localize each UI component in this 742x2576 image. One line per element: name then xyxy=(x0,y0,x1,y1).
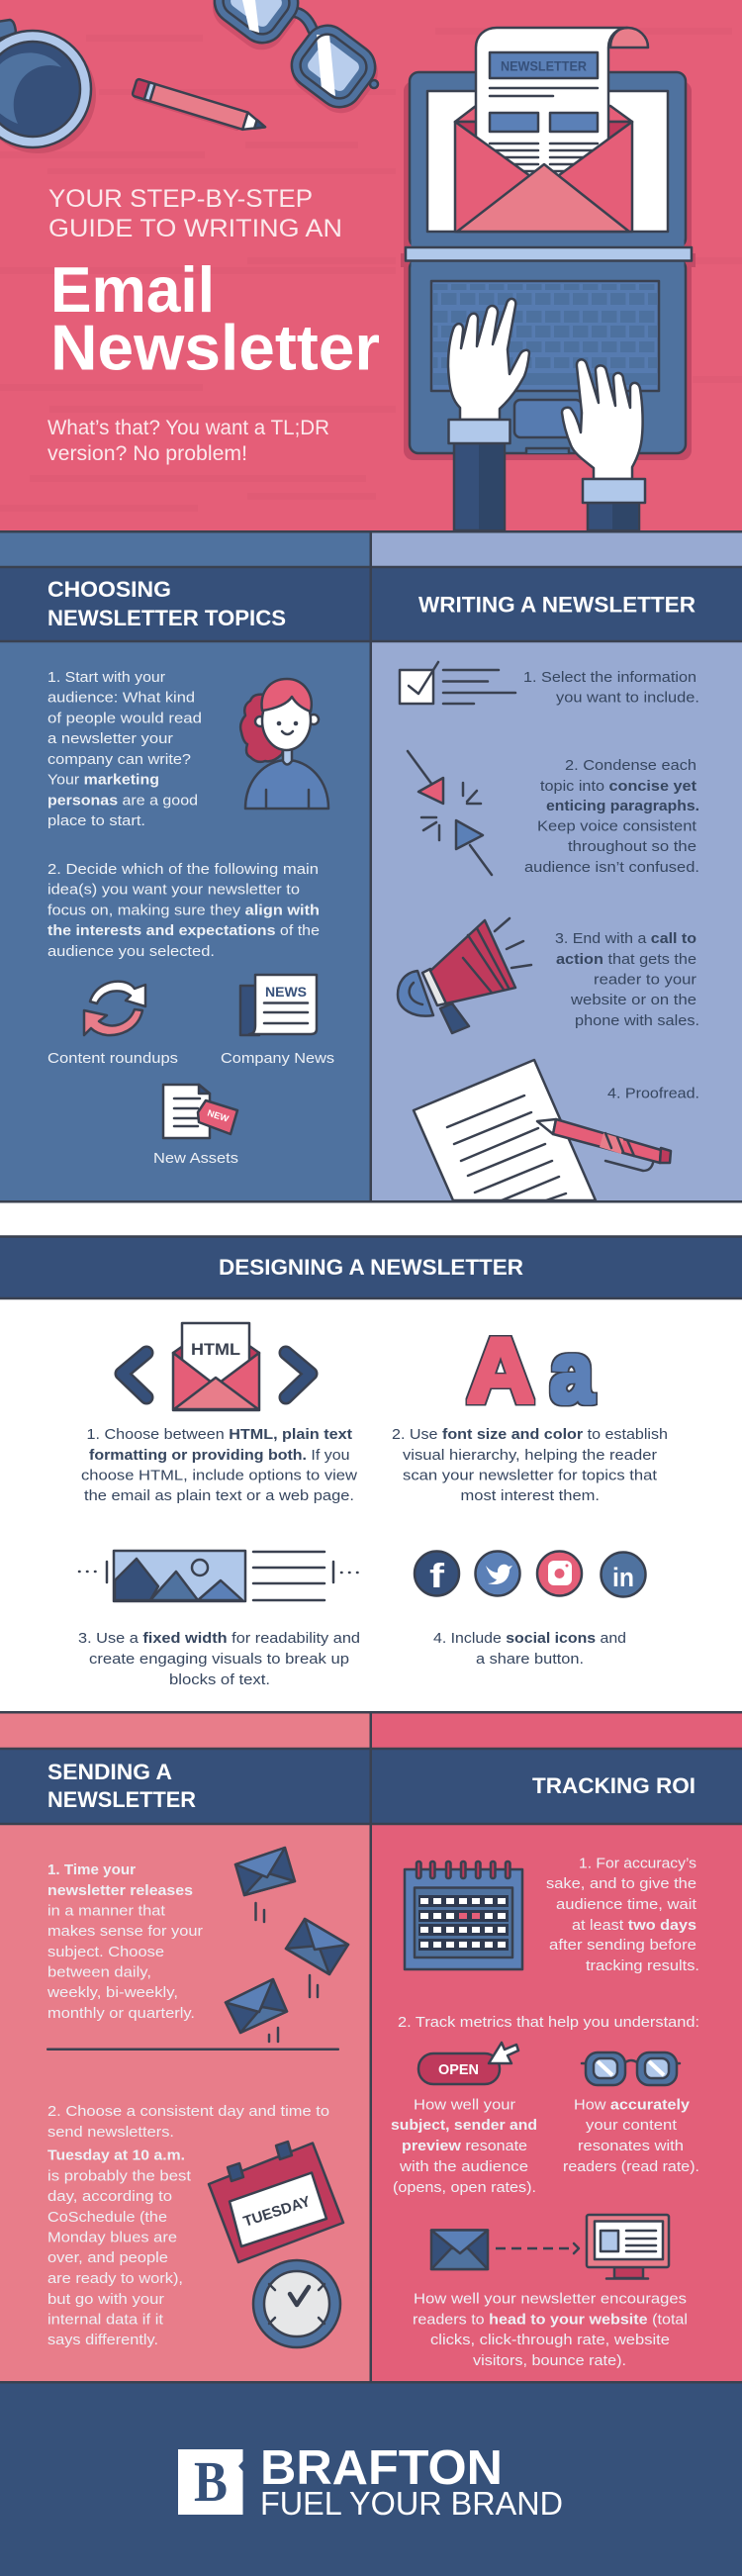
text block: sending step 2: send newsletters. xyxy=(47,2124,174,2141)
text block: sending step 1: makes sense for your xyxy=(47,1923,203,1940)
hero title: What’s that? You want a TL;DR xyxy=(47,417,329,439)
text block: design step 2: scan your newsletter for topics that xyxy=(403,1467,658,1484)
icon: clock xyxy=(253,2260,340,2347)
panel: sending a newsletter xyxy=(0,1712,370,2383)
icon: reading glasses xyxy=(582,2052,680,2085)
heading: choosing newsletter topics: NEWSLETTER TOPICS xyxy=(47,606,286,630)
text block: sending step 2: says differently. xyxy=(47,2332,158,2348)
icon: paper and pen xyxy=(414,1060,671,1200)
text block: design step 1: 1. Choose between HTML, plain text xyxy=(87,1426,352,1443)
text block: writing step 1: 1. Select the information xyxy=(523,669,696,686)
icon: glasses xyxy=(217,0,378,109)
text block: design step 2 xyxy=(392,1426,668,1504)
text block: writing step 3: phone with sales. xyxy=(575,1012,699,1029)
text block: step 1 audience: company can write? xyxy=(47,751,191,768)
panel: tracking roi xyxy=(371,1712,742,2383)
labels: content types: Company News xyxy=(221,1050,334,1067)
text block: website metric xyxy=(413,2290,688,2369)
icon: content roundups arrows xyxy=(84,982,145,1035)
logo: brafton xyxy=(178,2441,563,2522)
hero title: YOUR STEP-BY-STEP xyxy=(48,185,313,213)
text block: step 2 main ideas: audience you selected. xyxy=(47,943,215,960)
icon: monthly calendar xyxy=(405,1861,522,1969)
text block: read metric: resonates with xyxy=(578,2138,684,2154)
icon: company news: NEWS xyxy=(265,984,307,1000)
heading: choosing newsletter topics xyxy=(47,577,286,630)
heading: sending a newsletter xyxy=(47,1760,196,1812)
text block: sending step 1: between daily, xyxy=(47,1963,151,1981)
text block: writing step 2: enticing paragraphs. xyxy=(546,798,699,814)
text block: writing step 2: audience isn’t confused. xyxy=(524,859,699,876)
labels: content types xyxy=(47,1050,334,1167)
text block: sending step 2: but go with your xyxy=(47,2291,164,2308)
text block: step 1 audience: Your marketing xyxy=(47,772,159,788)
text block: writing step 1 xyxy=(523,669,699,707)
text block: read metric: How accurately xyxy=(574,2096,691,2114)
text block: design step 1: the email as plain text or a web page. xyxy=(84,1487,354,1504)
heading: sending a newsletter: SENDING A xyxy=(47,1760,172,1784)
text block: writing step 2 xyxy=(524,757,699,876)
text block: tracking step 1: after sending before xyxy=(549,1937,696,1954)
text block: step 1 audience: of people would read xyxy=(47,711,202,726)
text block: sending step 2: internal data if it xyxy=(47,2312,164,2328)
text block: tracking step 1 xyxy=(546,1855,699,1974)
icon: social icons: f xyxy=(429,1558,445,1595)
text block: step 2 main ideas: focus on, making sure they align with xyxy=(47,903,320,918)
text block: tracking step 1: sake, and to give the xyxy=(546,1875,696,1892)
hero title: Newsletter xyxy=(50,311,380,384)
text block: tracking step 1: tracking results. xyxy=(586,1957,699,1974)
footer xyxy=(0,2381,742,2576)
text block: website metric: readers to head to your website (total xyxy=(413,2312,688,2328)
logo: brafton: B xyxy=(194,2449,228,2514)
text block: open metric: (opens, open rates). xyxy=(393,2179,536,2196)
heading: tracking roi: TRACKING ROI xyxy=(532,1773,696,1798)
envelope back xyxy=(455,106,632,122)
text block: design step 1: choose HTML, include options to view xyxy=(81,1467,357,1484)
text block: website metric: How well your newsletter encourages xyxy=(414,2290,687,2308)
text block: sending step 1: subject. Choose xyxy=(47,1944,164,1960)
text block: sending step 1: monthly or quarterly. xyxy=(47,2005,195,2022)
panel: designing a newsletter xyxy=(0,1236,742,1688)
text block: writing step 3: reader to your xyxy=(594,972,696,988)
icon: right hand xyxy=(562,359,645,530)
icon: megaphone xyxy=(398,918,531,1033)
hero title: version? No problem! xyxy=(47,442,247,465)
text block: open metric: How well your xyxy=(414,2096,515,2114)
text block: sending step 2: is probably the best xyxy=(47,2167,192,2185)
icon: new assets: NEW xyxy=(206,1107,231,1124)
text block: design step 3: create engaging visuals to break up xyxy=(89,1651,349,1668)
text block: step 1 audience: audience: What kind xyxy=(47,689,195,707)
text block: step 2 main ideas: the interests and expectations of the xyxy=(47,922,320,939)
text block: sending step 1: weekly, bi-weekly, xyxy=(46,1984,178,2001)
icon: envelope to website xyxy=(431,2215,669,2278)
text block: design step 2: most interest them. xyxy=(461,1487,600,1504)
text block: sending step 2: day, according to xyxy=(47,2188,172,2205)
panel: choosing newsletter topics xyxy=(0,531,370,1201)
icon: tuesday calendar: TUESDAY xyxy=(241,2193,313,2231)
keyboard xyxy=(431,281,659,391)
text block: step 2 main ideas: 2. Decide which of the following main xyxy=(47,861,319,878)
text block: step 2 main ideas: idea(s) you want your newsletter to xyxy=(47,881,300,899)
labels: content types: Content roundups xyxy=(47,1050,178,1067)
newsletter paper: NEWSLETTER xyxy=(501,57,587,73)
text block: step 1 audience: place to start. xyxy=(47,812,145,829)
panel: writing a newsletter xyxy=(371,531,742,1201)
icon: html envelope: HTML xyxy=(191,1340,240,1359)
text block: design step 3: blocks of text. xyxy=(169,1671,270,1688)
text block: website metric: visitors, bounce rate). xyxy=(473,2352,626,2369)
labels: content types: New Assets xyxy=(153,1150,238,1167)
text block: writing step 3: 3. End with a call to xyxy=(555,930,696,947)
text block: tracking step 1: at least two days xyxy=(572,1917,696,1934)
hero panel xyxy=(0,0,742,530)
text block: open metric xyxy=(391,2096,537,2196)
text block: read metric: your content xyxy=(586,2117,678,2134)
icon: fixed width layout xyxy=(79,1551,358,1601)
text block: step 2 main ideas xyxy=(47,861,320,960)
text block: writing step 2: Keep voice consistent xyxy=(537,817,697,835)
icon: left hand xyxy=(448,299,529,530)
icon: social icons xyxy=(415,1552,645,1597)
icon: open button: OPEN xyxy=(438,2061,479,2078)
text block: tracking step 2 intro: 2. Track metrics that help you understand: xyxy=(398,2014,699,2031)
text block: design step 3: 3. Use a fixed width for readability and xyxy=(78,1630,360,1647)
text block: tracking step 1: 1. For accuracy’s xyxy=(579,1855,696,1872)
text block: design step 1 xyxy=(81,1426,357,1504)
text block: step 1 audience: a newsletter your xyxy=(47,730,173,747)
text block: writing step 3: website or on the xyxy=(570,992,696,1008)
text block: design step 4: a share button. xyxy=(476,1651,584,1668)
text block: tracking step 1: audience time, wait xyxy=(556,1896,697,1913)
icon: tuesday calendar xyxy=(209,2142,343,2262)
icon: persona xyxy=(240,679,328,809)
text block: design step 2: visual hierarchy, helping the reader xyxy=(403,1447,657,1464)
heading: sending a newsletter: NEWSLETTER xyxy=(47,1787,196,1812)
icon: checklist xyxy=(400,662,515,704)
text block: design step 2: 2. Use font size and color to establish xyxy=(392,1426,668,1443)
text block: sending step 1: in a manner that xyxy=(47,1902,166,1920)
icon: new assets xyxy=(163,1085,237,1138)
heading: writing a newsletter: WRITING A NEWSLETTER xyxy=(418,592,696,618)
icon: company news xyxy=(240,975,317,1035)
text block: design step 3 xyxy=(78,1630,360,1688)
newsletter paper xyxy=(476,28,648,188)
icon: pencil xyxy=(131,78,268,139)
text block: sending step 2: Tuesday at 10 a.m. xyxy=(47,2147,185,2163)
text block: step 1 audience: 1. Start with your xyxy=(47,669,165,686)
text block: writing step 2: topic into concise yet xyxy=(540,778,696,795)
icon: social icons: in xyxy=(612,1563,634,1592)
icon: font size letters: A xyxy=(467,1318,534,1422)
icon: html envelope xyxy=(122,1323,311,1410)
text block: open metric: subject, sender and xyxy=(391,2117,537,2134)
heading: choosing newsletter topics: CHOOSING xyxy=(47,577,171,602)
text block: writing step 4: 4. Proofread. xyxy=(607,1085,699,1102)
text block: sending step 2: Monday blues are xyxy=(47,2229,177,2246)
hero title: GUIDE TO WRITING AN xyxy=(48,215,342,242)
text block: step 1 audience xyxy=(47,669,202,829)
text block: writing step 2: 2. Condense each xyxy=(565,757,696,774)
icon: arrows converging xyxy=(408,751,492,875)
heading: designing a newsletter: DESIGNING A NEWSLETTER xyxy=(219,1255,523,1280)
icon: coffee mug xyxy=(0,20,96,153)
text block: design step 4: 4. Include social icons and xyxy=(433,1630,626,1647)
envelope front xyxy=(455,122,632,232)
hero title: Email xyxy=(50,253,215,326)
text block: sending step 2: are ready to work), xyxy=(47,2270,183,2287)
text block: sending step 2: CoSchedule (the xyxy=(47,2209,167,2226)
text block: sending step 2: 2. Choose a consistent day and time to xyxy=(47,2103,329,2120)
icon: font size letters xyxy=(467,1318,595,1422)
text block: sending step 1: newsletter releases xyxy=(47,1882,193,1899)
text block: writing step 3 xyxy=(555,930,699,1029)
text block: open metric: preview resonate xyxy=(402,2138,527,2154)
hero title xyxy=(47,185,380,465)
icon: falling envelopes xyxy=(226,1848,348,2042)
text block: design step 1: formatting or providing both. If you xyxy=(89,1447,350,1464)
icon: laptop with envelope and newsletter xyxy=(401,28,696,460)
text block: sending step 2 xyxy=(47,2103,329,2348)
icon: font size letters: a xyxy=(550,1323,595,1421)
text block: step 1 audience: personas are a good xyxy=(47,792,198,810)
text block: sending step 2: over, and people xyxy=(47,2249,168,2266)
logo: brafton: BRAFTON xyxy=(260,2441,503,2495)
text block: read metric xyxy=(563,2096,699,2175)
text block: website metric: clicks, click-through rate, website xyxy=(430,2332,670,2348)
text block: sending step 1: 1. Time your xyxy=(47,1861,136,1878)
text block: open metric: with the audience xyxy=(399,2158,528,2175)
text block: design step 4 xyxy=(433,1630,626,1668)
icon: open button xyxy=(418,2043,518,2084)
text block: sending step 1 xyxy=(46,1861,203,2022)
text block: writing step 3: action that gets the xyxy=(556,951,696,968)
text block: read metric: readers (read rate). xyxy=(563,2158,699,2175)
text block: writing step 1: you want to include. xyxy=(556,689,699,707)
text block: writing step 2: throughout so the xyxy=(568,838,696,855)
logo: brafton: FUEL YOUR BRAND xyxy=(260,2485,563,2522)
